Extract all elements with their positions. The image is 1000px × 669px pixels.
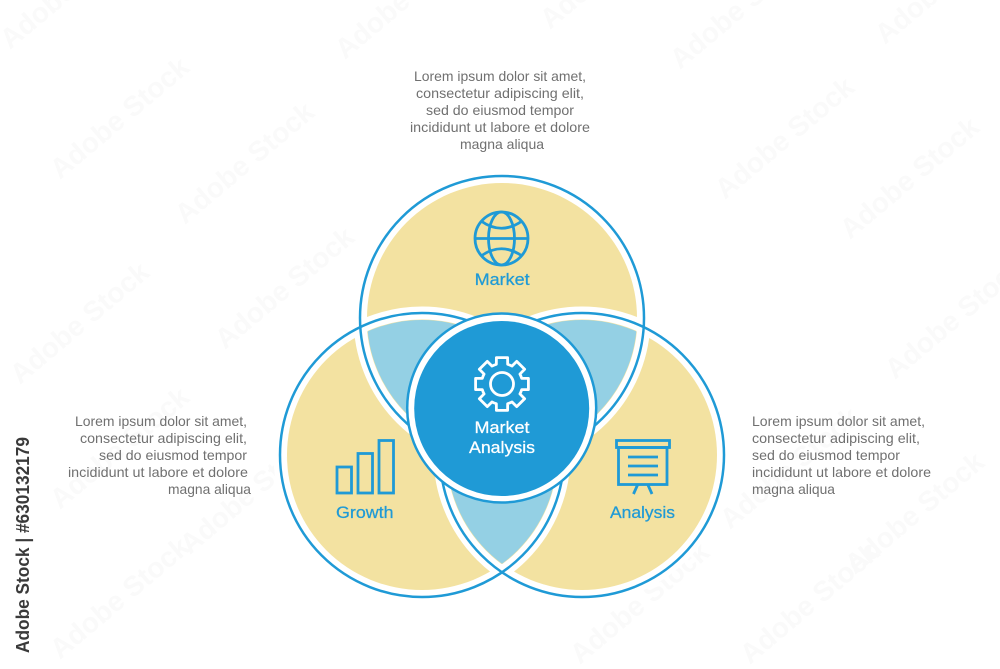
text block: top description: consectetur adipiscing elit, <box>416 85 584 101</box>
text block: top description: sed do eiusmod tempor <box>426 102 574 118</box>
label: Market Analysis: Market <box>474 419 530 437</box>
label: Market Analysis: Analysis <box>469 439 535 457</box>
watermark pattern: Adobe Stock <box>4 256 155 390</box>
text block: top description: incididunt ut labore et dolore <box>410 119 590 135</box>
text block: top description: magna aliqua <box>460 136 544 152</box>
watermark pattern: Adobe Stock <box>834 111 985 245</box>
yellow lobes <box>287 183 717 590</box>
text block: left description: incididunt ut labore et dolore <box>68 464 248 480</box>
watermark pattern: Adobe Stock <box>169 96 320 230</box>
watermark pattern: Adobe Stock <box>564 536 715 669</box>
light blue lens: market and analysis <box>548 320 636 414</box>
text block: top description <box>410 68 590 152</box>
infographic canvas <box>16 71 930 653</box>
text block: right description <box>752 413 931 497</box>
label: Market: Market <box>475 271 530 289</box>
text block: left description: magna aliqua <box>168 481 251 497</box>
label: Market Analysis <box>469 419 535 457</box>
watermark pattern: Adobe Stock <box>714 401 865 535</box>
icon: presentation board <box>616 440 670 494</box>
watermark pattern: Adobe Stock <box>709 71 860 205</box>
watermark pattern: Adobe Stock <box>174 426 325 560</box>
blue circle outlines <box>280 176 724 597</box>
light blue lens: growth and analysis <box>452 489 553 564</box>
text block: right description: Lorem ipsum dolor sit amet, <box>752 413 925 429</box>
watermark pattern: Adobe Stock <box>209 221 360 355</box>
text block: left description: Lorem ipsum dolor sit amet, <box>75 413 247 429</box>
white separator rings <box>280 176 724 597</box>
text block: left description: consectetur adipiscing elit, <box>80 430 247 446</box>
text block: right description: incididunt ut labore et dolore <box>752 464 931 480</box>
venn diagram <box>280 176 724 597</box>
text block: right description: consectetur adipiscing elit, <box>752 430 920 446</box>
watermark pattern: Adobe Stock <box>839 446 990 580</box>
icon: gear <box>476 358 528 410</box>
stock id text: Adobe Stock | #630132179 <box>13 437 33 653</box>
watermark pattern: Adobe Stock <box>44 381 195 515</box>
icon: globe <box>475 212 528 265</box>
watermark pattern: Adobe Stock <box>44 531 195 665</box>
label: Growth: Growth <box>336 504 394 522</box>
icon: bar chart <box>337 440 394 493</box>
text block: left description: sed do eiusmod tempor <box>99 447 247 463</box>
center circle <box>407 314 596 502</box>
watermark pattern: Adobe Stock <box>44 51 195 185</box>
label: Analysis: Analysis <box>610 504 675 522</box>
text block: right description: magna aliqua <box>752 481 835 497</box>
light blue lens: market and growth <box>368 320 456 414</box>
text block: right description: sed do eiusmod tempor <box>752 447 900 463</box>
watermark pattern: Adobe Stock <box>734 536 885 669</box>
text block: left description <box>68 413 251 497</box>
text block: top description: Lorem ipsum dolor sit amet, <box>414 68 586 84</box>
